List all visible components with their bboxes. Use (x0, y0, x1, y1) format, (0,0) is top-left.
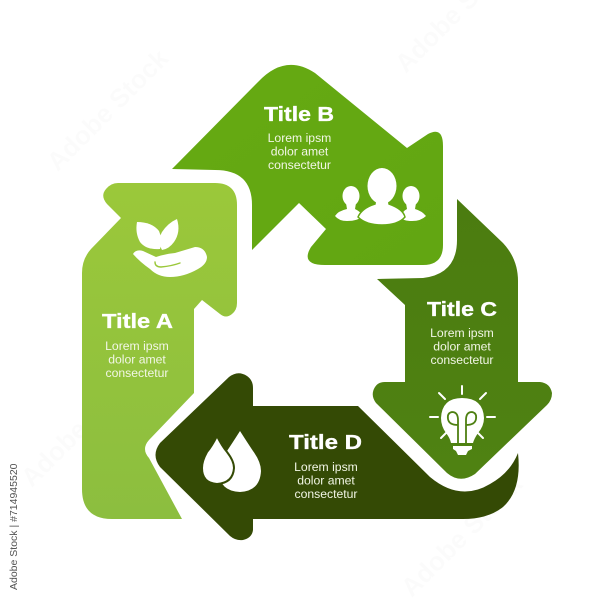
text A (105, 339, 169, 380)
title D: Title D (289, 432, 362, 454)
text A: Lorem ipsm (105, 339, 169, 353)
text D: consectetur (294, 487, 358, 501)
text B: Lorem ipsm (268, 131, 331, 145)
icon: people (335, 168, 426, 225)
text C (430, 326, 494, 367)
text D: dolor amet (297, 474, 355, 488)
text C: Lorem ipsm (430, 326, 494, 340)
icon: water drops (202, 431, 261, 492)
arrow A shape (82, 183, 237, 519)
text C: consectetur (430, 353, 494, 367)
text A: consectetur (105, 366, 169, 380)
arrow C shape (373, 199, 552, 479)
text B: consectetur (268, 158, 331, 172)
stock credit: Adobe Stock | #714945520 (8, 463, 20, 590)
text B (268, 131, 331, 172)
arrow C (373, 199, 552, 479)
text D (294, 460, 358, 501)
arrow B shape (172, 65, 443, 265)
arrow B (172, 65, 443, 265)
icon: leaves in hand (133, 219, 207, 277)
text D: Lorem ipsm (294, 460, 358, 474)
title C: Title C (427, 299, 497, 321)
arrow D (156, 373, 519, 540)
arrow A (82, 183, 237, 519)
text A: dolor amet (108, 352, 166, 366)
text B: dolor amet (271, 144, 329, 158)
title B: Title B (264, 104, 334, 126)
title A: Title A (102, 311, 173, 333)
text C: dolor amet (433, 340, 491, 354)
icon: light bulb (430, 386, 495, 455)
arrow D shape (156, 373, 519, 540)
